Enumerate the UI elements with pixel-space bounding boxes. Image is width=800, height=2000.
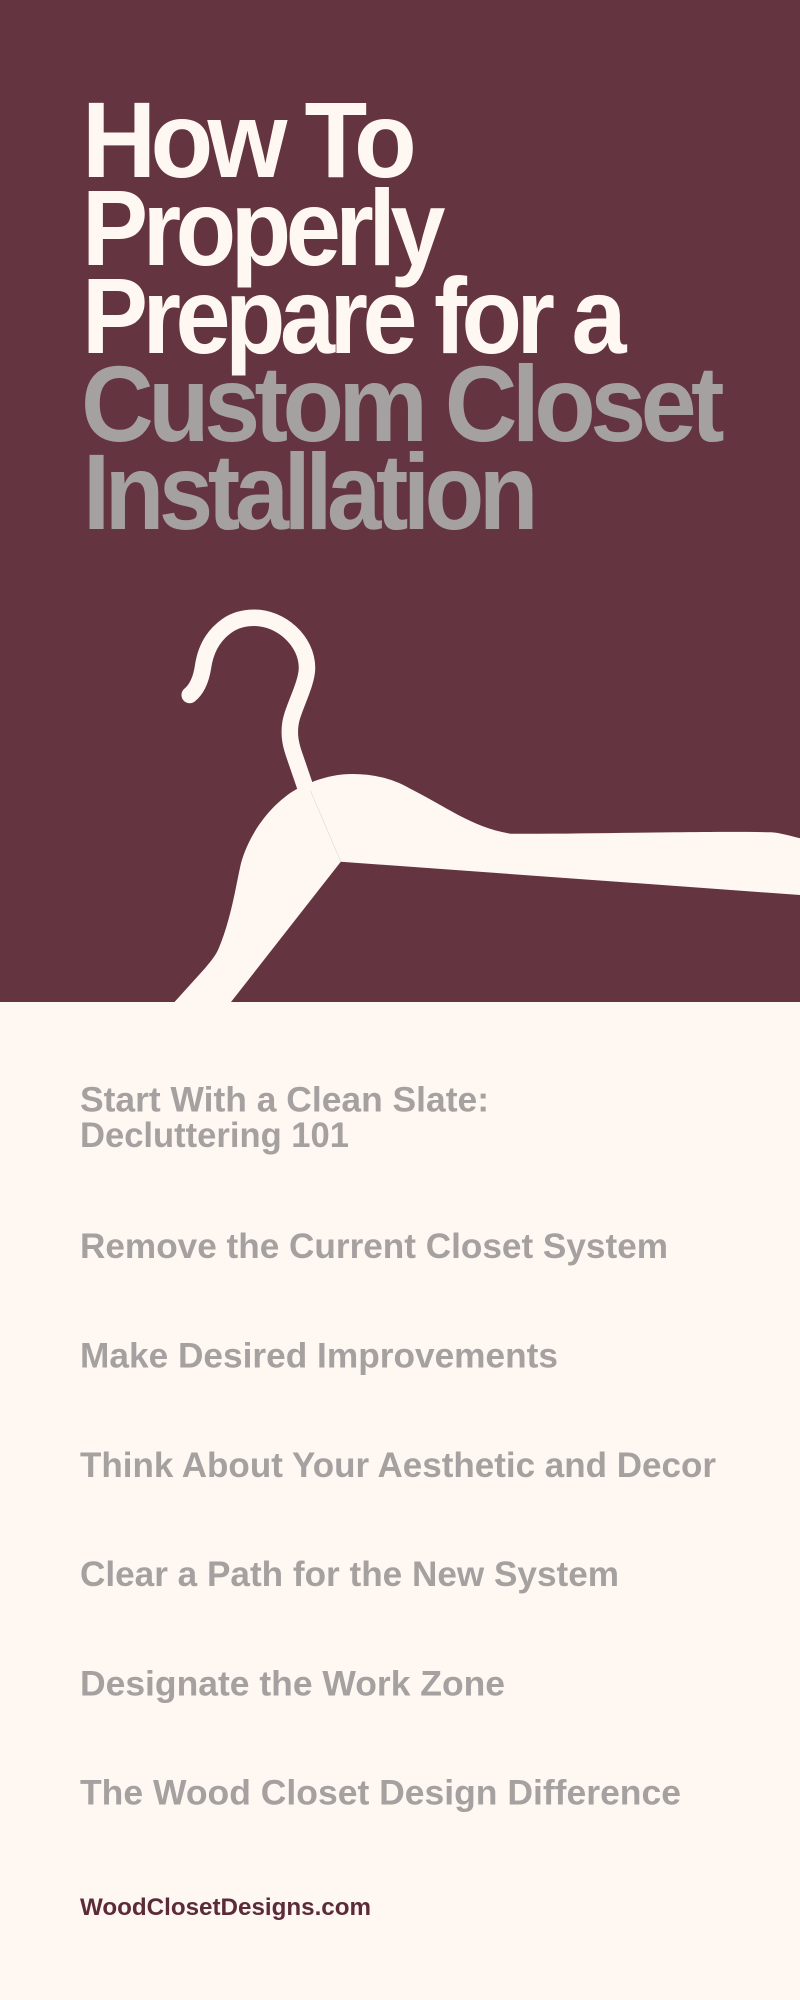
item 6: Designate the Work Zone — [80, 1664, 505, 1704]
item 1 line 1: Start With a Clean Slate: — [80, 1080, 489, 1120]
item 3: Make Desired Improvements — [80, 1336, 558, 1376]
icon: clothes hanger — [174, 618, 800, 1002]
item 5: Clear a Path for the New System — [80, 1555, 619, 1594]
item 7: The Wood Closet Design Difference — [80, 1774, 681, 1812]
title — [81, 79, 724, 552]
hanger seam — [310, 791, 341, 862]
title line: Custom Closet: Custom Closet — [81, 343, 724, 464]
website footer: WoodClosetDesigns.com — [80, 1894, 371, 1921]
item 1 line 2: Decluttering 101 — [80, 1116, 349, 1155]
panel: maroon header — [0, 0, 800, 1002]
hanger hook — [190, 618, 307, 792]
item 1 — [80, 1080, 489, 1155]
item 2: Remove the Current Closet System — [80, 1227, 668, 1266]
title line: How To: How To — [82, 79, 413, 200]
hanger body — [174, 774, 800, 1002]
title line: Prepare for a: Prepare for a — [82, 255, 627, 376]
title line: Properly: Properly — [82, 167, 445, 288]
title line: Installation: Installation — [83, 431, 533, 552]
item 4: Think About Your Aesthetic and Decor — [80, 1446, 716, 1485]
section list — [80, 1080, 716, 1812]
